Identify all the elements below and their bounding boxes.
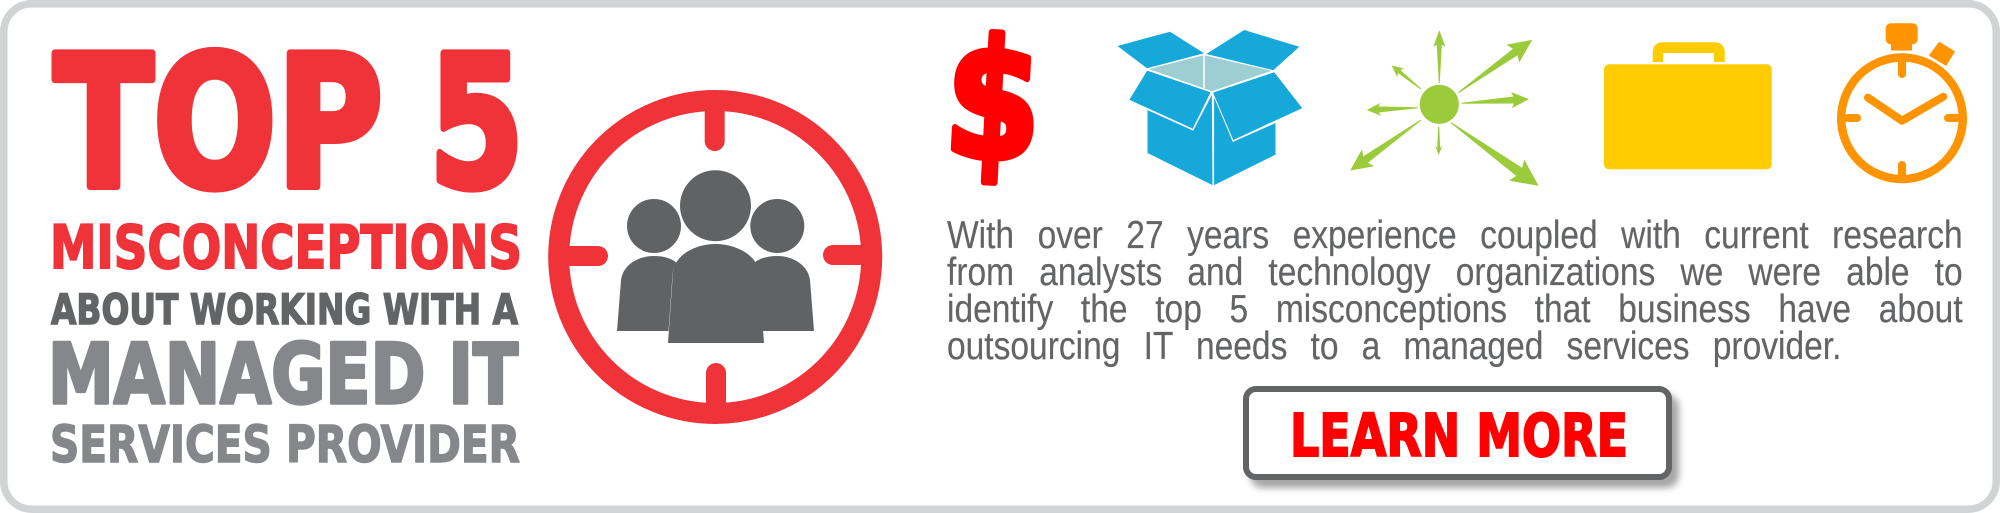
text block: description paragraph: outsourcing IT needs to a managed services provider. <box>947 325 1841 368</box>
target ring and ticks <box>559 100 872 414</box>
text block: description paragraph: from analysts and technology organizations we were able to <box>947 251 1963 294</box>
icon: open box <box>1118 30 1303 186</box>
icon: dollar sign: $ <box>940 3 1046 199</box>
heading: TOP 5: TOP <box>54 17 383 229</box>
icon: arrows radiating from circle <box>1344 30 1546 196</box>
heading: ABOUT WORKING WITH A: ABOUT WORKING WITH A <box>51 285 518 334</box>
heading: TOP 5: 5 <box>429 17 524 229</box>
heading: MISCONCEPTIONS: MISCONCEPTIONS <box>50 213 522 283</box>
text block: description paragraph: identify the top 5 misconceptions that business have about <box>947 288 1963 331</box>
icon: briefcase <box>1604 42 1772 169</box>
icon: target with people <box>559 100 872 414</box>
icon: stopwatch <box>1841 23 1963 179</box>
text block: description paragraph: With over 27 years experience coupled with current research <box>947 214 1963 256</box>
heading: SERVICES PROVIDER: SERVICES PROVIDER <box>50 416 520 475</box>
people group <box>617 170 814 343</box>
heading: MANAGED IT: MANAGED IT <box>48 326 518 423</box>
title block <box>48 17 524 475</box>
button: learn more <box>1243 386 1672 480</box>
